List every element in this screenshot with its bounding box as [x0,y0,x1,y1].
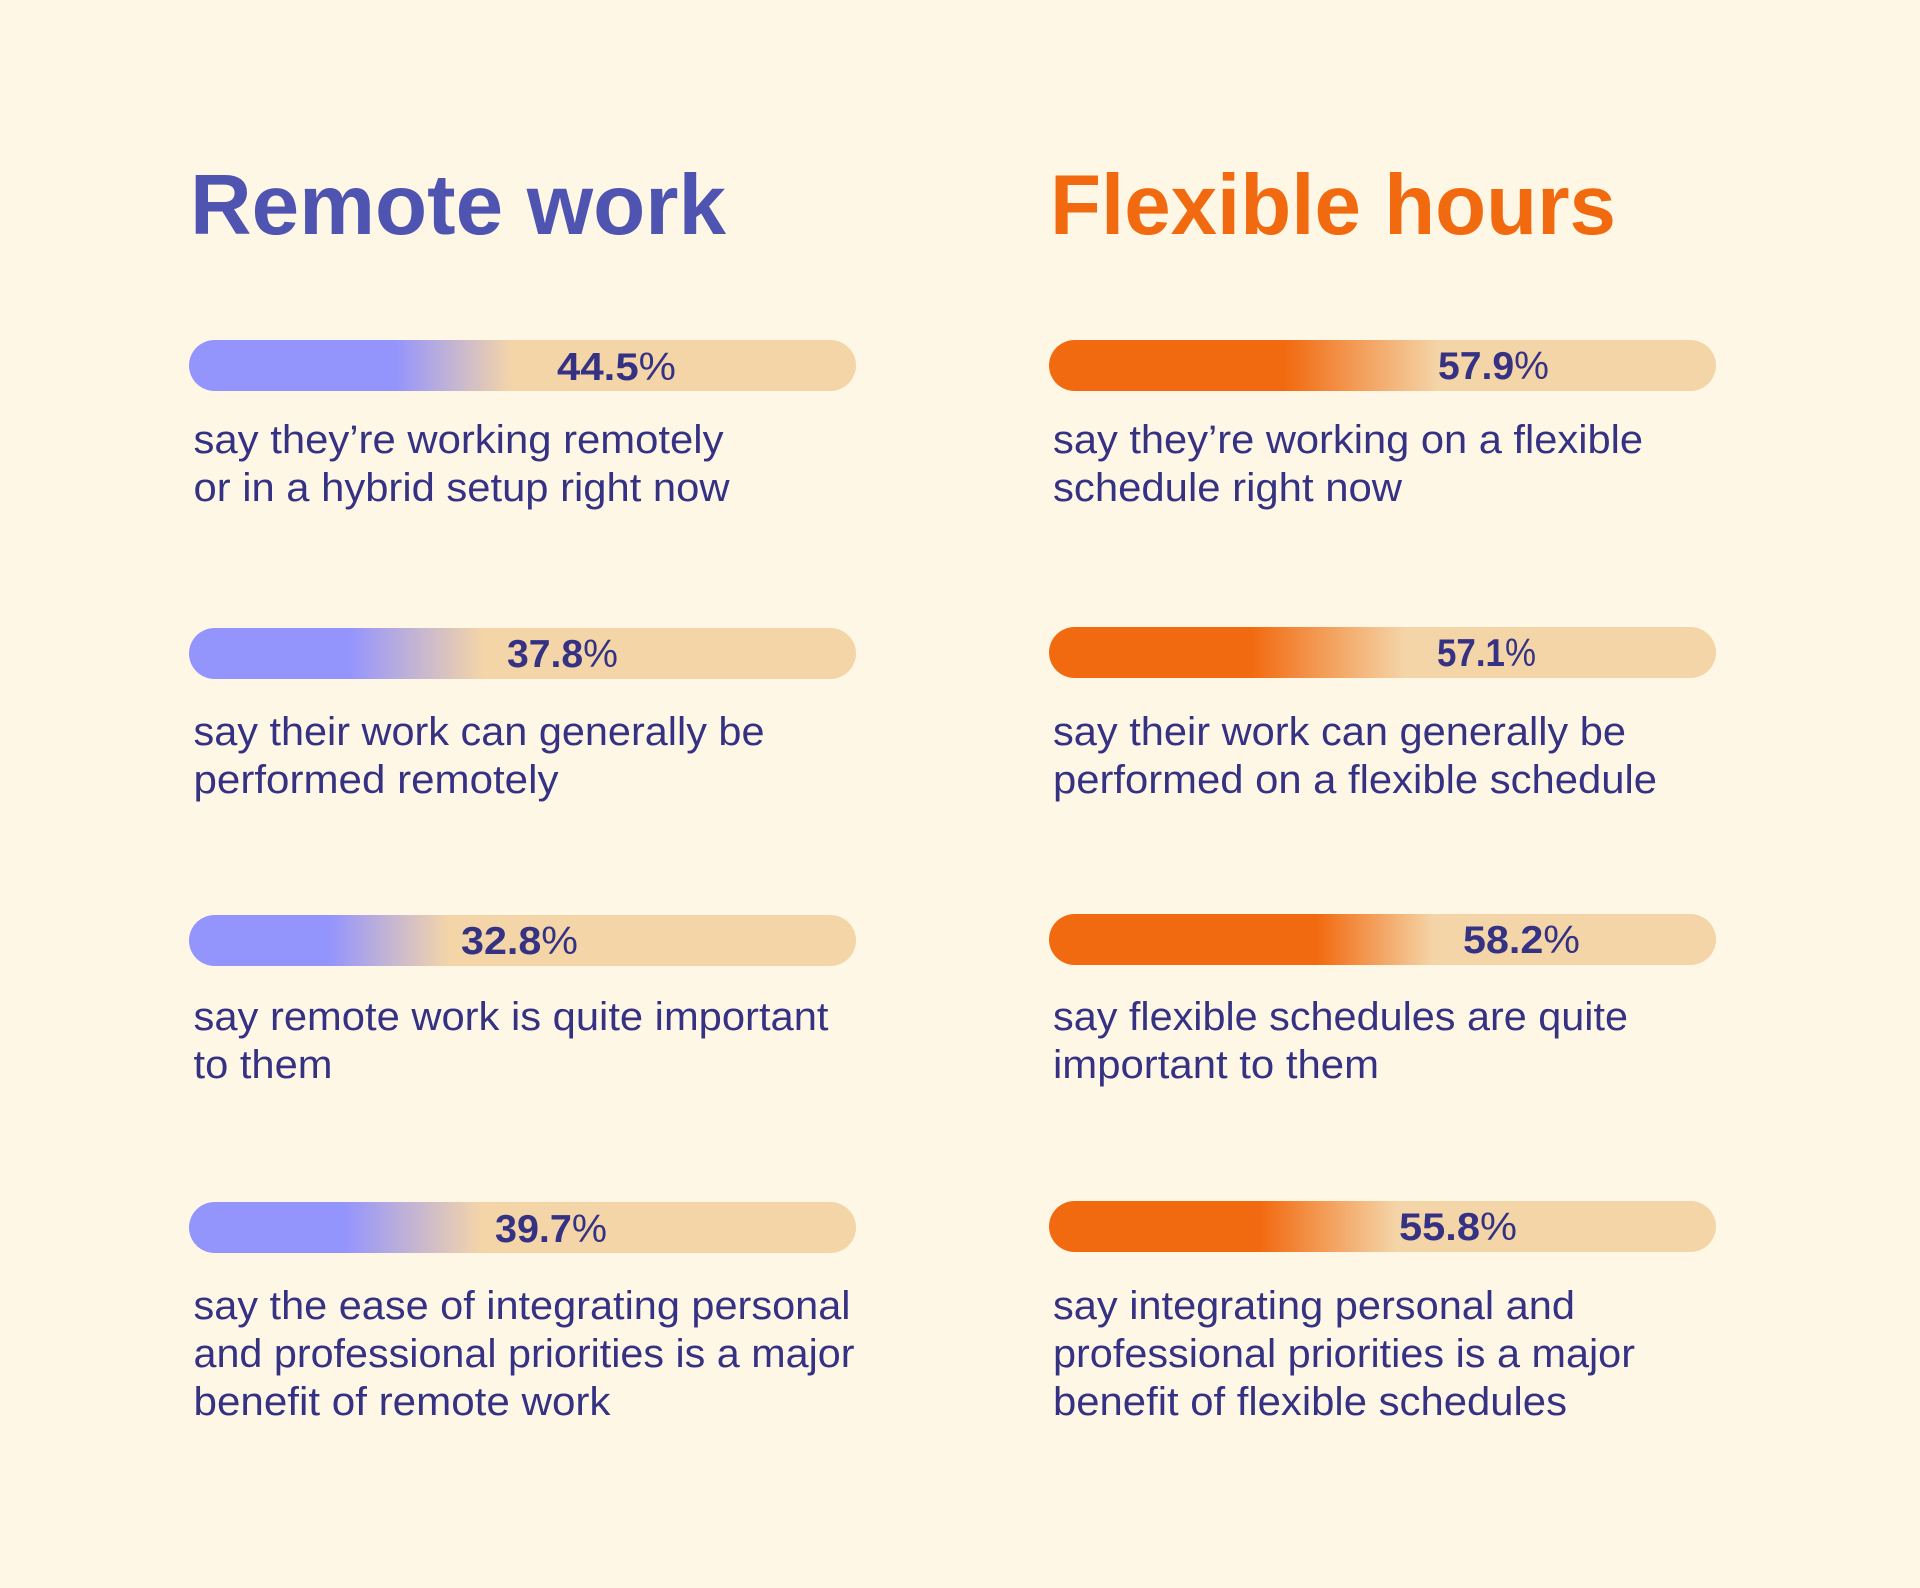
stat: remote 32.8% [189,915,856,1087]
description: or in a hybrid setup right now [194,466,730,510]
stat: flexible 57.1% [1049,627,1716,802]
stat: remote 44.5% [189,340,856,510]
description: say remote work is quite important [194,995,828,1039]
description: say flexible schedules are quite [1053,995,1628,1039]
progress bar 58.2% [1049,914,1716,965]
value 58.2%: 58.2% [1463,919,1580,962]
description [1053,995,1628,1087]
value 32.8%: 32.8% [461,920,578,963]
description [1053,1284,1635,1424]
value 57.1%: 57.1% [1437,632,1536,675]
description: performed on a flexible schedule [1053,758,1657,802]
description: benefit of flexible schedules [1053,1380,1567,1424]
description: say they’re working remotely [194,418,724,462]
description: and professional priorities is a major [194,1332,854,1376]
progress bar 57.1% [1049,627,1716,678]
description: say the ease of integrating personal [194,1284,850,1328]
description [1053,710,1657,802]
description: say their work can generally be [194,710,764,754]
heading: Remote work: Remote work [190,158,727,253]
heading: Flexible hours: Flexible hours [1050,158,1616,253]
progress bar 37.8% [189,628,856,679]
value 57.9%: 57.9% [1438,345,1549,388]
description: say integrating personal and [1053,1284,1575,1328]
progress bar 44.5% [189,340,856,391]
value 44.5%: 44.5% [557,346,676,389]
progress bar 55.8% [1049,1201,1716,1252]
progress bar 57.9% [1049,340,1716,391]
stat: flexible 58.2% [1049,914,1716,1087]
description: important to them [1053,1043,1379,1087]
stat: flexible 57.9% [1049,340,1716,510]
description [194,418,730,510]
panel: remote work [189,158,856,1424]
description [194,1284,854,1424]
description [194,710,764,802]
panel: flexible hours [1049,158,1716,1424]
description: say they’re working on a flexible [1053,418,1643,462]
value 55.8%: 55.8% [1399,1206,1517,1249]
value 37.8%: 37.8% [507,633,618,676]
progress bar 39.7% [189,1202,856,1253]
progress bar 32.8% [189,915,856,966]
description: schedule right now [1053,466,1402,510]
value 39.7%: 39.7% [495,1208,607,1251]
stat: remote 37.8% [189,628,856,802]
description: say their work can generally be [1053,710,1626,754]
description: performed remotely [194,758,558,802]
description: professional priorities is a major [1053,1332,1635,1376]
description: to them [194,1043,332,1087]
description [1053,418,1643,510]
description [194,995,828,1087]
stat: remote 39.7% [189,1202,856,1424]
stat: flexible 55.8% [1049,1201,1716,1424]
description: benefit of remote work [194,1380,612,1424]
